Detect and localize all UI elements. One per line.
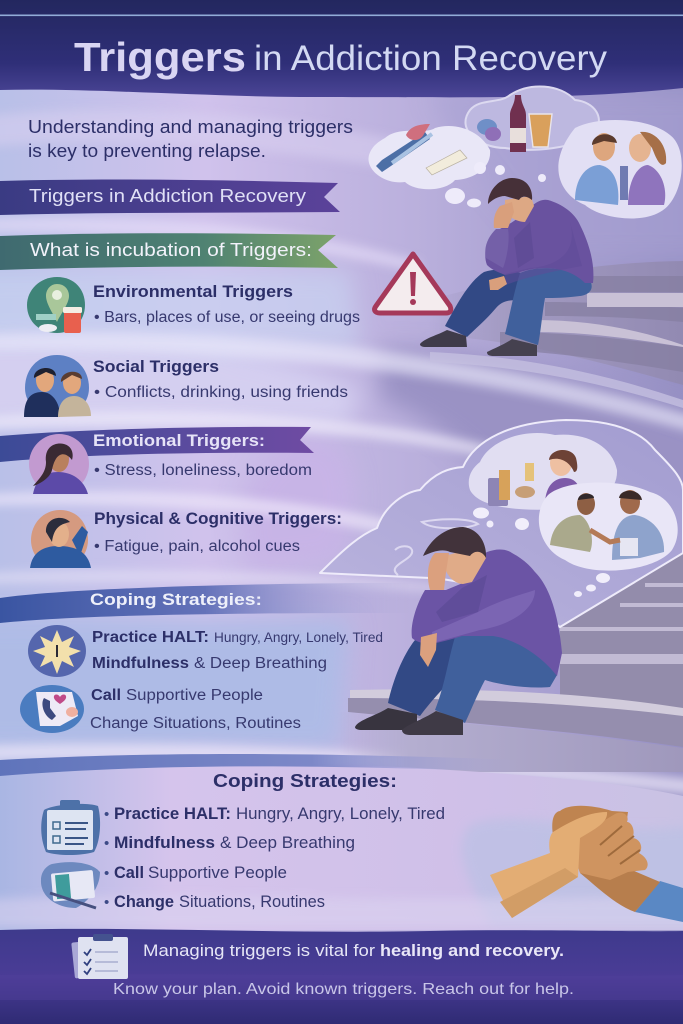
- shoes: [420, 330, 467, 347]
- text: practice HALT and mindfulness: Practice HALT:: [114, 805, 231, 823]
- text: coping list two: Supportive People: [126, 687, 263, 704]
- heading: Coping Strategies:: [213, 770, 397, 791]
- thought cloud: woman with drink: [469, 433, 617, 510]
- ribbon: triggers in addiction recovery: [0, 180, 340, 215]
- thought bubbles: [445, 162, 546, 208]
- closing message: Managing triggers is vital for: [143, 941, 375, 960]
- right fist: [576, 813, 648, 880]
- shoes: [355, 708, 417, 730]
- person: lower figure seated on steps: [355, 527, 562, 735]
- text: social triggers: Social Triggers: [93, 358, 219, 376]
- text: practice HALT and mindfulness: Hungry, Angry, Lonely, Tired: [236, 805, 445, 823]
- text: call and change: Situations, Routines: [179, 893, 325, 911]
- text: practice HALT and mindfulness: Mindfulness: [114, 834, 215, 852]
- icon: emotional woman: [29, 434, 89, 494]
- ribbon: what is incubation of triggers: [0, 233, 338, 270]
- text: coping list one: Mindfulness: [92, 655, 189, 672]
- text: call and change: •: [104, 865, 109, 882]
- icon: phone and notes: [41, 862, 100, 908]
- title: [74, 34, 608, 80]
- icon: clasped hands: [490, 806, 683, 922]
- hoodie: [485, 200, 593, 283]
- ribbon: coping strategies: Coping Strategies:: [90, 590, 262, 609]
- text: coping list one: Practice HALT:: [92, 629, 209, 646]
- text: environmental triggers: Environmental Triggers: [93, 283, 293, 301]
- text: practice HALT and mindfulness: & Deep Breathing: [220, 834, 355, 852]
- blue sleeve: [635, 881, 683, 922]
- text: emotional triggers bullet: • Stress, loneliness, boredom: [94, 462, 312, 479]
- icon: physical tired person: [30, 510, 91, 568]
- tagline: Know your plan. Avoid known triggers. Reach out for help.: [113, 981, 574, 998]
- text: practice HALT and mindfulness: •: [104, 835, 109, 852]
- warning triangle icon: [375, 254, 451, 313]
- person: upper figure seated on steps: [420, 178, 593, 356]
- stairs and ground: upper scene: [430, 261, 683, 408]
- ribbon: coping strategies: [0, 583, 410, 623]
- header banner: [0, 0, 683, 97]
- fingers behind: [552, 806, 628, 846]
- upper thought clouds: [368, 86, 682, 218]
- stairs and ground: lower scene: [340, 553, 683, 772]
- text: call and change: [104, 864, 325, 911]
- thought cloud: two men: [539, 483, 678, 571]
- icon: checklist clipboard: [71, 934, 128, 979]
- left hand and forearm: [490, 812, 607, 918]
- text: coping list two: Change Situations, Routines: [90, 715, 301, 732]
- text: physical and cognitive triggers: [94, 510, 342, 555]
- title: in Addiction Recovery: [254, 39, 608, 78]
- intro text: is key to preventing relapse.: [28, 141, 266, 161]
- footer banner: [0, 929, 683, 1024]
- ribbon: emotional triggers: Emotional Triggers:: [93, 432, 265, 450]
- icon: checklist clipboard: [41, 800, 100, 855]
- text: environmental triggers: • Bars, places of use, or seeing drugs: [94, 309, 360, 326]
- panel: bottom coping strategies: [0, 754, 683, 930]
- text: practice HALT and mindfulness: [104, 805, 445, 852]
- intro text: Understanding and managing triggers: [28, 117, 353, 137]
- front leg: [505, 268, 592, 345]
- large thought bubble: lower scene: [320, 420, 683, 627]
- text: coping list two: [90, 687, 301, 732]
- back leg: [445, 270, 535, 337]
- text: call and change: Change: [114, 893, 174, 911]
- right forearm: [580, 865, 660, 912]
- thought bubbles: [473, 508, 610, 597]
- thought cloud: couple drinking: [558, 120, 682, 218]
- text: physical and cognitive triggers: • Fatigue, pain, alcohol cues: [94, 538, 300, 555]
- text: call and change: Supportive People: [148, 864, 287, 882]
- text: social triggers: • Conflicts, drinking, using friends: [94, 384, 348, 401]
- icon: HALT sunburst: [28, 625, 86, 677]
- text: social triggers: [93, 358, 348, 401]
- thought cloud: alcohol: [465, 86, 599, 152]
- ribbon: triggers in addiction recovery: Triggers in Addiction Recovery: [29, 186, 306, 206]
- icon: social pair: [24, 355, 91, 417]
- front leg: [435, 632, 557, 723]
- text: coping list two: Call: [91, 687, 121, 704]
- hand on knee: [420, 633, 437, 667]
- hoodie: [412, 550, 562, 676]
- text: practice HALT and mindfulness: •: [104, 806, 109, 823]
- intro text: [28, 117, 353, 161]
- ribbon: what is incubation of triggers: What is incubation of Triggers:: [30, 240, 312, 260]
- closing message: healing and recovery.: [380, 941, 564, 960]
- text: environmental triggers: [93, 283, 360, 326]
- text: coping list one: Hungry, Angry, Lonely, Tired: [214, 629, 383, 645]
- icon: phone and heart: [20, 685, 84, 733]
- text: call and change: Call: [114, 864, 144, 882]
- closing message: [143, 941, 564, 960]
- icon: location pin and pills: [27, 277, 85, 333]
- text: coping list one: & Deep Breathing: [194, 655, 327, 672]
- raised arm: [485, 229, 509, 268]
- face and hand: [505, 196, 534, 222]
- thought cloud: drugs: [368, 124, 490, 189]
- title: Triggers: [74, 34, 246, 80]
- text: call and change: •: [104, 894, 109, 911]
- text: coping list one: [92, 629, 383, 672]
- back leg: [388, 633, 482, 716]
- text: physical and cognitive triggers: Physical & Cognitive Triggers:: [94, 510, 342, 528]
- ribbon: emotional triggers: [0, 427, 314, 462]
- head and raised hand: [445, 545, 486, 584]
